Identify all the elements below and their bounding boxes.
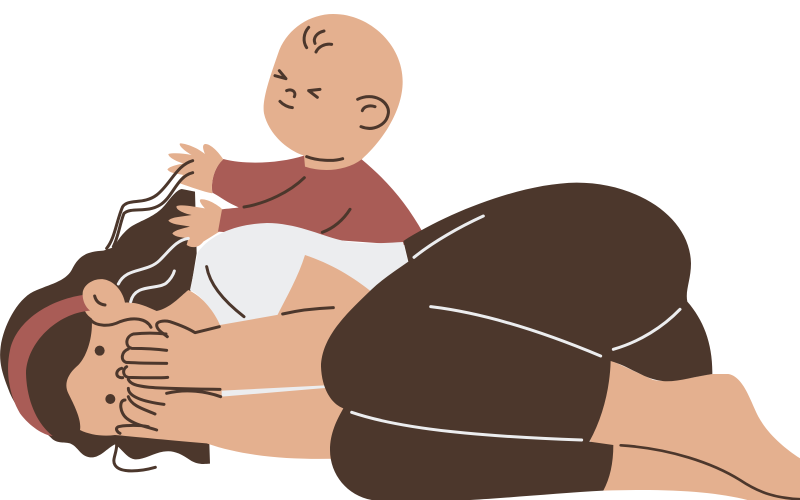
baby upper hand [167, 143, 223, 193]
mother skin: head, ear, shoulder and arms [66, 255, 373, 459]
baby face and clothing lines [244, 27, 388, 232]
mother white shirt [190, 223, 408, 330]
baby head [264, 14, 403, 170]
baby lower hand [168, 199, 222, 247]
shorts highlight lines [352, 216, 680, 440]
mother hair [0, 189, 213, 464]
grey sliver between arms [222, 385, 325, 397]
baby red sweater [212, 156, 423, 245]
mother lower legs and feet [590, 360, 800, 500]
mother brown shorts [321, 183, 712, 500]
hair strands [107, 161, 193, 471]
calf line [621, 445, 800, 499]
red headband [8, 295, 90, 436]
baby [167, 14, 423, 247]
mother face and hands line work [91, 267, 333, 433]
